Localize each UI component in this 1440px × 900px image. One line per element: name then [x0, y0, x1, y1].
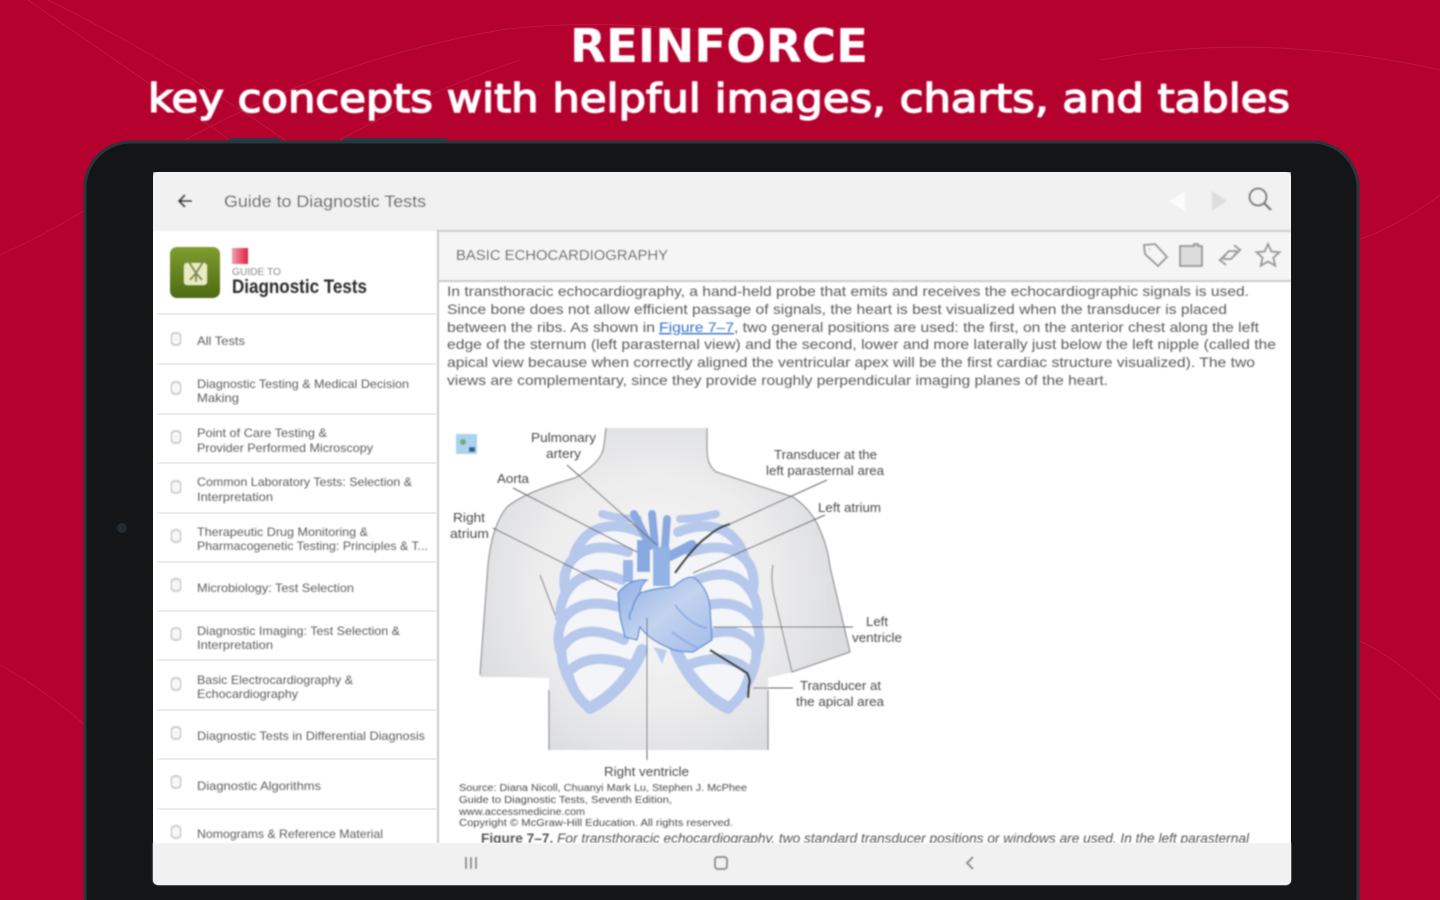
rib bands: [559, 514, 642, 708]
sidebar menu: Diagnostic Imaging: Test Selection &: [197, 624, 400, 638]
article paragraph: Figure 7–7: [659, 319, 734, 335]
diagram labels: Pulmonary: [531, 430, 597, 445]
sidebar icons: [171, 333, 181, 838]
title: [148, 19, 1290, 122]
sidebar menu: Diagnostic Tests in Differential Diagnosis: [197, 729, 425, 743]
figure source: Copyright © McGraw-Hill Education. All rights reserved.: [459, 818, 733, 829]
leader lines: [493, 465, 853, 760]
diagram labels: artery: [546, 446, 582, 461]
diagram labels: [450, 430, 902, 779]
title: REINFORCE: [570, 19, 868, 73]
article paragraph: , two general positions are used: the first, on the anterior chest along the left: [734, 319, 1259, 335]
sidebar menu: Pharmacogenetic Testing: Principles & T...: [197, 539, 428, 553]
icon: tag: [1144, 244, 1167, 266]
icon: image thumbnail: [456, 434, 477, 454]
diagram labels: Left atrium: [818, 500, 881, 515]
article paragraph: between the ribs. As shown in: [447, 319, 655, 335]
figure source: www.accessmedicine.com: [458, 807, 585, 818]
icon: note: [1180, 244, 1202, 266]
diagram labels: Right ventricle: [604, 764, 689, 779]
sidebar logo: [170, 247, 367, 298]
article paragraph: views are complementary, since they provide roughly perpendicular imaging planes of the heart.: [447, 372, 1108, 388]
sidebar logo: GUIDE TO: [232, 267, 281, 278]
sidebar menu: Point of Care Testing &: [197, 426, 327, 440]
app bar: Guide to Diagnostic Tests: [224, 192, 426, 211]
sidebar menu: Microbiology: Test Selection: [197, 581, 354, 595]
sidebar menu: All Tests: [197, 334, 245, 348]
sidebar menu: Diagnostic Testing & Medical Decision: [197, 377, 409, 391]
sidebar logo: Diagnostic Tests: [232, 277, 367, 298]
icon: star: [1257, 244, 1279, 266]
screen: [153, 172, 1291, 885]
sidebar menu: [197, 334, 428, 841]
diagram labels: the apical area: [796, 694, 885, 709]
heart: [634, 514, 692, 556]
torso silhouette: [480, 428, 850, 750]
sidebar menu: Nomograms & Reference Material: [197, 827, 383, 841]
icon: share: [1219, 245, 1241, 265]
transducers: [675, 524, 730, 573]
figure source: Guide to Diagnostic Tests, Seventh Edition,: [459, 795, 672, 806]
figure source: Source: Diana Nicoll, Chuanyi Mark Lu, Stephen J. McPhee: [459, 783, 747, 794]
title: key concepts with helpful images, charts, and tables: [148, 77, 1290, 122]
sidebar menu: Provider Performed Microscopy: [197, 441, 373, 455]
diagram labels: Transducer at the: [774, 447, 877, 462]
sidebar menu: Making: [197, 391, 239, 405]
content header: [438, 231, 1291, 885]
figure source: [458, 783, 747, 829]
diagram labels: Right: [453, 510, 485, 525]
content header: BASIC ECHOCARDIOGRAPHY: [456, 247, 668, 264]
navigation bar: [153, 843, 1291, 885]
tablet frame: [85, 138, 1358, 900]
app bar: [153, 172, 1291, 231]
diagram labels: left parasternal area: [766, 463, 885, 478]
sidebar menu: Common Laboratory Tests: Selection &: [197, 475, 412, 489]
article paragraph: Since bone does not allow efficient passage of signals, the heart is best visualized when the transducer is placed: [447, 301, 1227, 317]
article paragraph: edge of the sternum (left parasternal view) and the second, lower and more laterally just below the left nipple (called the: [447, 336, 1276, 352]
diagram labels: Transducer at: [800, 678, 881, 693]
diagram labels: Aorta: [497, 471, 530, 486]
diagram labels: atrium: [450, 526, 489, 541]
sidebar menu: Diagnostic Algorithms: [197, 779, 321, 793]
diagram labels: Left: [866, 614, 888, 629]
sidebar menu: Therapeutic Drug Monitoring &: [197, 525, 368, 539]
chest anatomy diagram: [450, 428, 902, 779]
article paragraph: In transthoracic echocardiography, a hand-held probe that emits and receives the echocardiographic signals is used.: [447, 283, 1249, 299]
article paragraph: [447, 283, 1276, 388]
sidebar dividers: [157, 314, 436, 809]
rib cage spaces: [565, 628, 616, 700]
article paragraph: apical view because when correctly aligned the ventricular apex will be the first cardiac structure visualized). The two: [447, 354, 1255, 370]
figure caption: Figure 7–7. For transthoracic echocardiography, two standard transducer positions or windows are used. In the left parasternal: [481, 831, 1250, 846]
sidebar menu: Interpretation: [197, 638, 273, 652]
sidebar menu: Basic Electrocardiography &: [197, 673, 353, 687]
diagram labels: ventricle: [852, 630, 902, 645]
sidebar menu: Echocardiography: [197, 687, 298, 701]
sidebar menu: Interpretation: [197, 490, 273, 504]
